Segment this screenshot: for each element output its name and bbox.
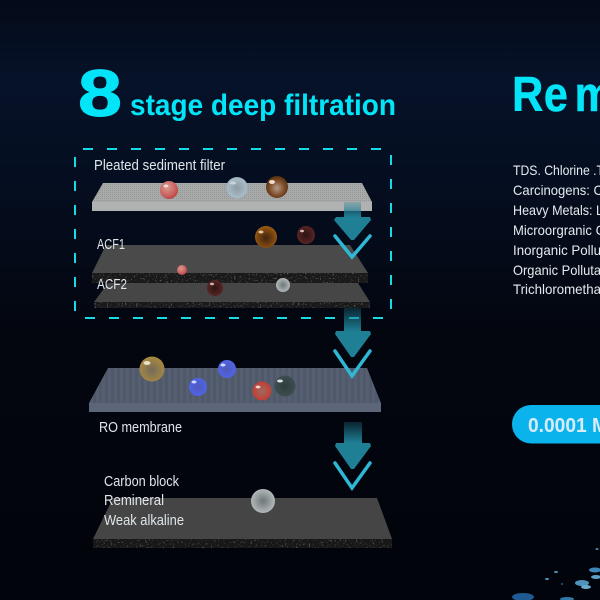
title: 8 stage deep filtration (78, 56, 396, 130)
water splash: bottom right (512, 548, 600, 600)
layer: RO membrane (89, 368, 381, 412)
layer: pleated sediment filter (92, 183, 372, 211)
label: carbon block, remineral, weak alkaline (104, 473, 184, 529)
arrow: RO to carbon block (335, 422, 371, 488)
title: 8 stage deep filtration: stage deep filtration (130, 89, 396, 122)
layer: ACF1 (92, 245, 368, 283)
label: ACF2: ACF2 (97, 276, 127, 293)
label: RO membrane: RO membrane (99, 419, 182, 436)
label: ACF1: ACF1 (97, 236, 125, 253)
title: 8 stage deep filtration: 8 (78, 56, 122, 130)
particles: contaminants (140, 176, 315, 513)
text block: removed contaminants (513, 162, 600, 297)
label: Pleated sediment filter: Pleated sediment filter (94, 157, 225, 174)
arrow: ACF to RO (335, 308, 371, 376)
layer: carbon block (93, 498, 392, 548)
layer: ACF2 (94, 283, 370, 308)
label: carbon block, remineral, weak alkaline: Carbon block (104, 473, 179, 490)
label: carbon block, remineral, weak alkaline: Weak alkaline (104, 512, 184, 529)
label: carbon block, remineral, weak alkaline: Remineral (104, 492, 164, 509)
arrow: sediment to ACF (334, 202, 371, 257)
pill: 0.0001 micron (512, 405, 600, 444)
dashed box: pre-filter group (75, 149, 391, 318)
